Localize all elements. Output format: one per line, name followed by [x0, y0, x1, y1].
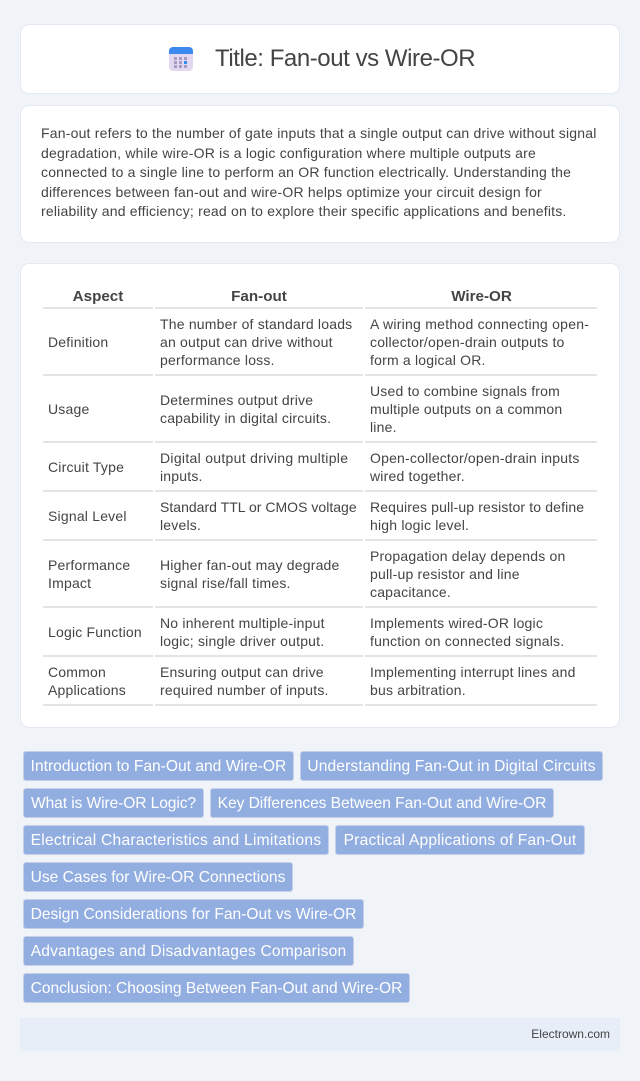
row: Common Applications: required number of inputs. [160, 682, 329, 698]
row: Performance Impact: pull-up resistor and line [370, 566, 520, 582]
table header: Aspect [73, 288, 123, 305]
footer credit: Electrown.com [531, 1027, 610, 1041]
table header: Fan-out [231, 288, 287, 305]
row: Performance Impact: Higher fan-out may degrade [160, 557, 340, 573]
tag: Electrical Characteristics and Limitations [31, 832, 321, 849]
tag [23, 936, 354, 966]
row: Common Applications: Common [48, 664, 106, 680]
tag [23, 899, 364, 929]
title card [20, 24, 620, 94]
row: Circuit Type [48, 450, 580, 484]
row: Usage: capability in digital circuits. [160, 410, 331, 426]
row: Common Applications: bus arbitration. [370, 682, 466, 698]
row: Usage: line. [370, 419, 397, 435]
row: Performance Impact [48, 548, 566, 600]
tag [335, 825, 585, 855]
tag [23, 788, 204, 818]
row: Signal Level [48, 499, 584, 533]
row: Common Applications [48, 664, 576, 698]
tag: Introduction to Fan-Out and Wire-OR [31, 758, 286, 775]
row: Definition: an output can drive without [160, 334, 333, 350]
row: Definition [48, 316, 589, 368]
intro text: Fan-out refers to the number of gate inputs that a single output can drive without signal [41, 125, 597, 141]
tag [210, 788, 554, 818]
title: Title: Fan-out vs Wire-OR [215, 45, 475, 72]
row: Circuit Type: Circuit Type [48, 459, 124, 475]
row: Signal Level: Signal Level [48, 508, 127, 524]
row: Usage: Determines output drive [160, 392, 313, 408]
row: Logic Function: function on connected signals. [370, 633, 564, 649]
row: Usage: Usage [48, 401, 89, 417]
row: Performance Impact: Propagation delay depends on [370, 548, 566, 564]
tag: Use Cases for Wire-OR Connections [31, 869, 285, 886]
tag: Key Differences Between Fan-Out and Wire-OR [218, 795, 546, 812]
tag: Design Considerations for Fan-Out vs Wire-OR [31, 906, 356, 923]
row: Signal Level: Requires pull-up resistor to define [370, 499, 584, 515]
icon: calendar [169, 47, 193, 71]
tag: Understanding Fan-Out in Digital Circuits [307, 758, 596, 775]
row: Performance Impact: signal rise/fall times. [160, 575, 291, 591]
row: Signal Level: Standard TTL or CMOS voltage [160, 499, 357, 515]
row: Usage: Used to combine signals from [370, 383, 560, 399]
row: Logic Function: Implements wired-OR logic [370, 615, 543, 631]
tag [23, 973, 410, 1003]
row: Logic Function: logic; single driver output. [160, 633, 324, 649]
table header: Wire-OR [451, 288, 512, 305]
intro text: reliability and efficiency; read on to explore their specific applications and benefits. [41, 203, 567, 219]
row: Logic Function [48, 615, 564, 649]
row: Definition: performance loss. [160, 352, 275, 368]
tag: What is Wire-OR Logic? [31, 795, 196, 812]
intro text: degradation, while wire-OR is a logic configuration where multiple outputs are [41, 145, 536, 161]
tag [23, 862, 293, 892]
row: Circuit Type: Digital output driving multiple [160, 450, 348, 466]
row: Definition: form a logical OR. [370, 352, 486, 368]
row: Logic Function: Logic Function [48, 624, 142, 640]
row: Performance Impact: capacitance. [370, 584, 451, 600]
row: Definition: Definition [48, 334, 108, 350]
row: Definition: collector/open-drain outputs to [370, 334, 565, 350]
row: Circuit Type: inputs. [160, 468, 203, 484]
intro card [20, 105, 620, 243]
tag: Practical Applications of Fan-Out [344, 832, 576, 849]
row: Signal Level: levels. [160, 517, 201, 533]
row: Usage [48, 383, 562, 435]
table header [73, 288, 512, 305]
tag [300, 751, 603, 781]
row: Performance Impact: Performance [48, 557, 130, 573]
footer [20, 1018, 620, 1051]
tag: Advantages and Disadvantages Comparison [31, 943, 346, 960]
row: Common Applications: Ensuring output can drive [160, 664, 324, 680]
row: Circuit Type: Open-collector/open-drain inputs [370, 450, 580, 466]
intro text [41, 125, 597, 219]
tag: Conclusion: Choosing Between Fan-Out and Wire-OR [31, 980, 402, 997]
tag [23, 825, 329, 855]
row: Performance Impact: Impact [48, 575, 91, 591]
row: Signal Level: high logic level. [370, 517, 469, 533]
comparison table [43, 288, 597, 706]
row: Definition: A wiring method connecting open- [370, 316, 589, 332]
row: Usage: multiple outputs on a common [370, 401, 562, 417]
row: Common Applications: Implementing interrupt lines and [370, 664, 576, 680]
intro text: differences between fan-out and wire-OR helps optimize your circuit design for [41, 184, 542, 200]
row: Circuit Type: wired together. [370, 468, 465, 484]
row: Logic Function: No inherent multiple-input [160, 615, 325, 631]
row: Definition: The number of standard loads [160, 316, 352, 332]
topic tags [23, 751, 603, 1003]
intro text: connected to a single line to perform an OR function electrically. Understanding the [41, 164, 571, 180]
row: Common Applications: Applications [48, 682, 126, 698]
table card [20, 263, 620, 728]
tag [23, 751, 294, 781]
